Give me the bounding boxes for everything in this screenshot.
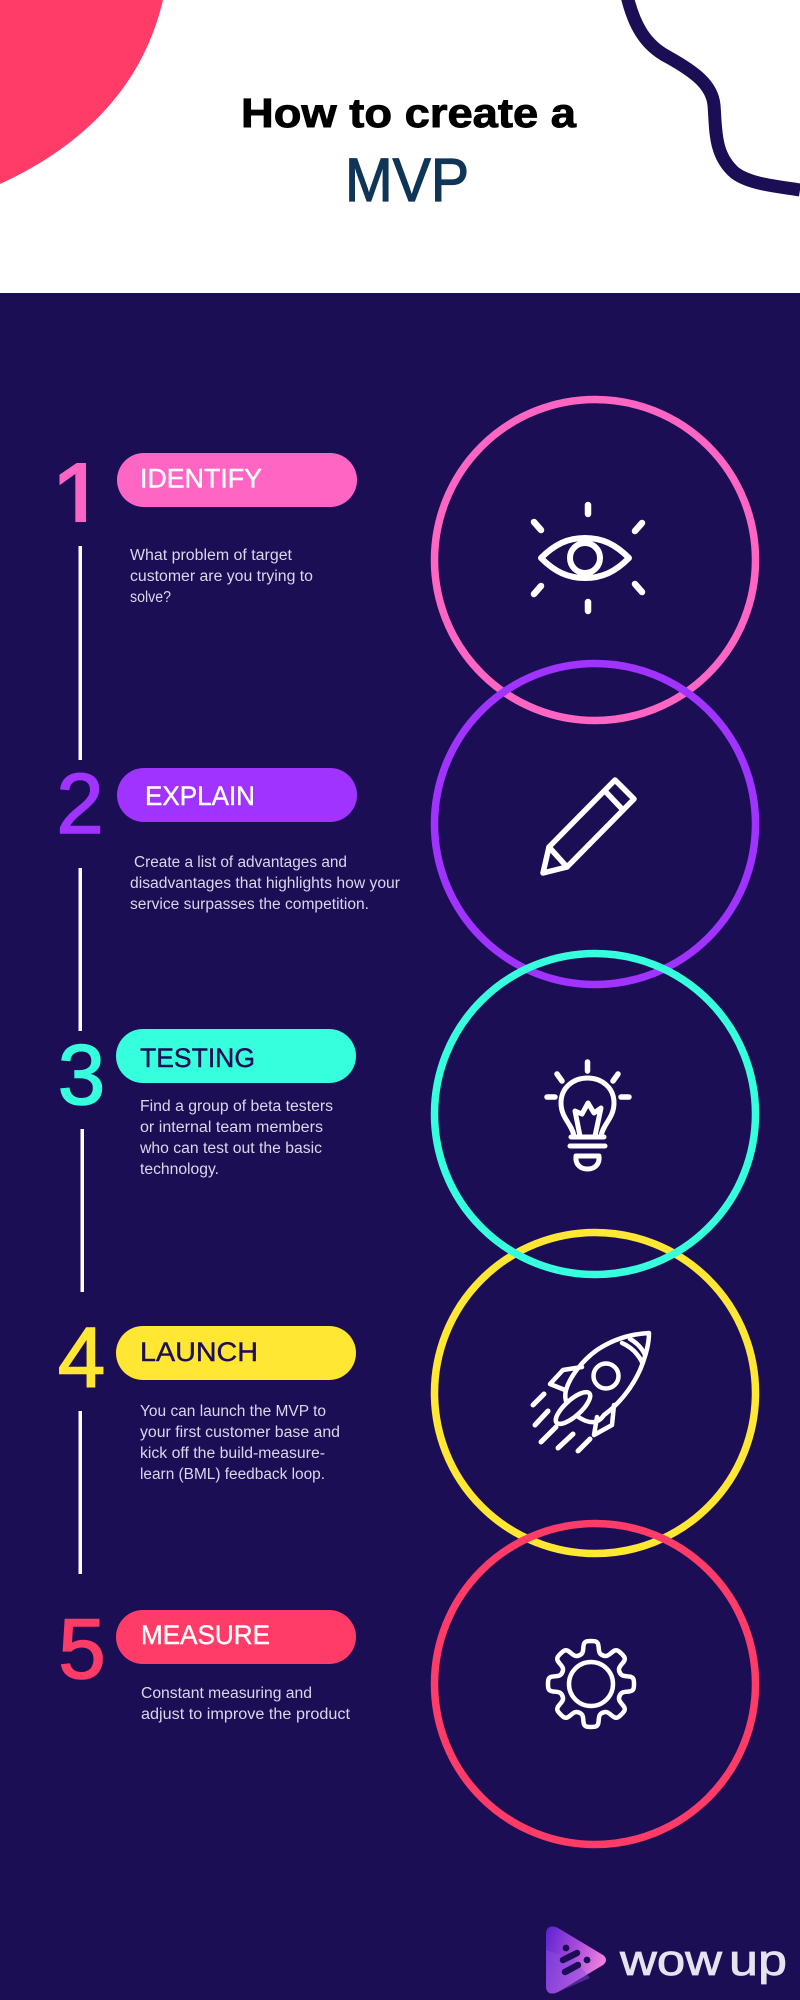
logo mark [546,1926,606,1994]
circle: measure [434,1524,756,1844]
connector line 2 [78,868,82,1031]
logo: wow up [546,1926,787,1994]
description 1: solve? [130,589,171,606]
panel: step 2 explain [56,757,400,1031]
pill: launch [116,1326,356,1380]
circle: explain [434,664,756,984]
connector line 3 [80,1129,84,1292]
logo wordmark: up [729,1936,787,1985]
description 3: technology. [140,1161,219,1178]
description 3: Find a group of beta testers [140,1098,333,1115]
pill: explain [117,768,357,822]
circle: launch [434,1232,756,1554]
number 1: 1 [50,442,107,556]
heading: how to create a: How to create a [241,90,577,136]
description 3: who can test out the basic [139,1140,322,1157]
description 1 [130,547,313,606]
pill: explain: EXPLAIN [145,781,255,811]
panel: step 5 measure [58,1602,356,1723]
logo wordmark [619,1936,787,1985]
description 1: What problem of target [130,547,293,564]
icon: eye [534,505,642,611]
description 3: or internal team members [140,1119,323,1136]
connector line 1 [78,546,82,760]
description 5: adjust to improve the product [141,1706,351,1723]
description 1: customer are you trying to [130,568,313,585]
number 2: 2 [56,757,104,852]
circle: identify [434,400,756,720]
icon: light bulb [547,1062,629,1169]
number 4: 4 [58,1311,105,1406]
number 3: 3 [58,1028,105,1123]
pill: identify [117,453,357,507]
description 2: service surpasses the competition. [130,896,369,913]
pill: testing: TESTING [140,1043,255,1073]
panel: step 3 testing [58,1028,356,1292]
heading: MVP: MVP [345,146,469,214]
icon: pencil [543,780,634,873]
panel: step 1 identify [50,442,357,760]
description 3 [139,1098,333,1178]
decoration: wavy line [627,0,800,190]
pill: measure: MEASURE [141,1620,270,1650]
icon: gear [548,1641,634,1727]
description 4: learn (BML) feedback loop. [140,1466,325,1483]
title [241,90,577,214]
connector line 4 [78,1411,82,1574]
panel: step 4 launch [58,1311,356,1574]
pill: launch: LAUNCH [140,1337,258,1367]
description 4: You can launch the MVP to [140,1403,326,1420]
pill: identify: IDENTIFY [140,464,262,494]
pill: testing [116,1029,356,1083]
description 5: Constant measuring and [141,1685,312,1702]
description 2 [130,854,400,913]
logo wordmark: wow [619,1936,722,1985]
description 2: Create a list of advantages and [134,854,347,871]
description 4: kick off the build-measure- [140,1445,325,1462]
circle: testing [434,954,756,1274]
description 4: your first customer base and [140,1424,340,1441]
decoration: red corner circle [0,0,163,184]
pill: measure [116,1610,356,1664]
number 5: 5 [58,1602,106,1697]
description 5 [141,1685,351,1723]
description 4 [140,1403,340,1483]
icon: rocket [533,1333,649,1451]
description 2: disadvantages that highlights how your [130,875,400,892]
